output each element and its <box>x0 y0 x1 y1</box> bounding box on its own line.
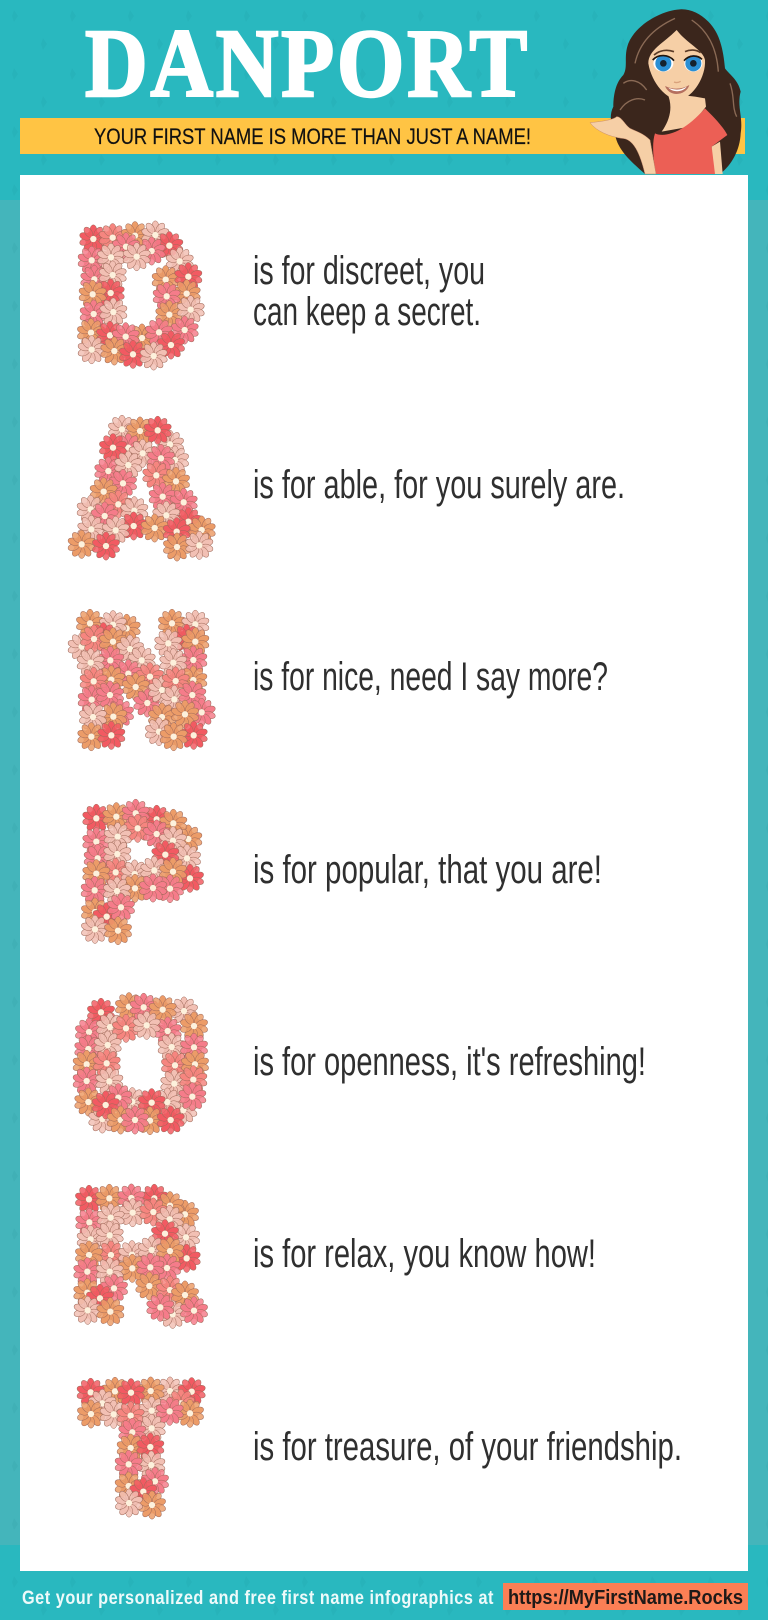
flower letter A <box>67 415 216 561</box>
text: D: is for discreet, you <box>253 249 485 293</box>
other arm <box>712 142 723 174</box>
hair highlights <box>620 18 737 117</box>
flower letter D <box>76 221 205 370</box>
left eye <box>653 55 674 72</box>
neck <box>662 93 706 132</box>
teeth <box>668 87 687 91</box>
letter P row <box>80 799 602 945</box>
footer link badge: https://MyFirstName.Rocks <box>508 1587 743 1609</box>
letter T row <box>76 1377 682 1519</box>
shirt <box>653 108 727 174</box>
character illustration: woman presenting <box>590 9 741 174</box>
text: A: is for able, for you surely are. <box>253 463 625 507</box>
eyebrows <box>654 50 701 55</box>
letter R row <box>73 1184 596 1328</box>
letter O row <box>72 992 646 1135</box>
flower letter O <box>72 992 210 1135</box>
text: D <box>253 249 485 334</box>
flower letter P <box>80 799 205 945</box>
footer text: Get your personalized and free first name infographics at <box>22 1588 494 1609</box>
hair <box>611 9 741 174</box>
letter N row <box>67 609 608 751</box>
letter D row <box>76 221 485 370</box>
flower letter T <box>76 1377 206 1519</box>
mouth <box>665 85 689 94</box>
flower letter N <box>67 609 216 751</box>
banner bar <box>20 118 745 154</box>
text: D: can keep a secret. <box>253 290 481 334</box>
title: DANPORT <box>85 10 530 117</box>
raised arm and hand <box>590 117 656 174</box>
text: R: is for relax, you know how! <box>253 1232 596 1276</box>
right eye <box>684 55 702 72</box>
tagline: YOUR FIRST NAME IS MORE THAN JUST A NAME! <box>94 124 531 149</box>
flower letter R <box>73 1184 209 1328</box>
text: P: is for popular, that you are! <box>253 848 602 892</box>
nose <box>674 81 681 83</box>
face <box>648 30 705 100</box>
letter A row <box>67 415 625 561</box>
text: N: is for nice, need I say more? <box>253 655 608 699</box>
